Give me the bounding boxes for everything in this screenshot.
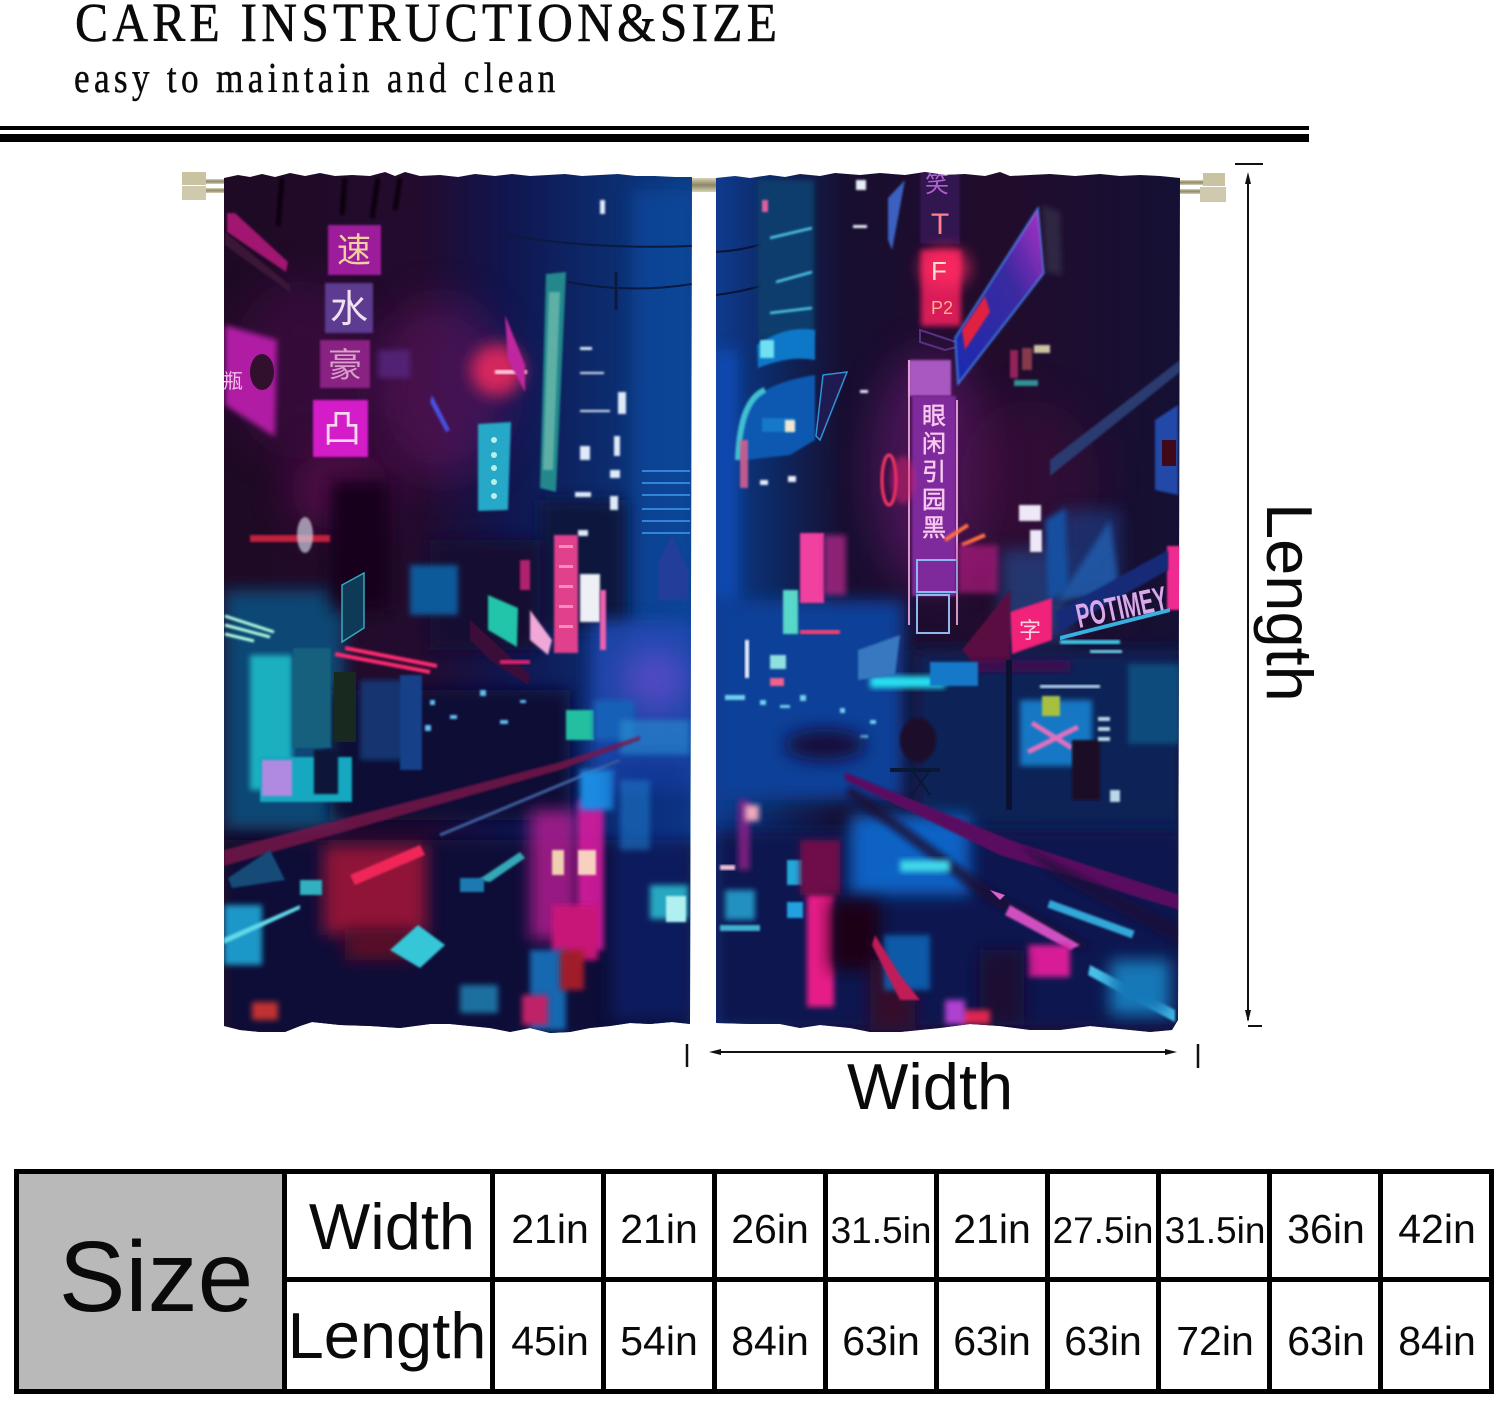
width row: 21in: [953, 1206, 1031, 1252]
length row: 54in: [620, 1318, 698, 1364]
right curtain wet street reflections: [720, 772, 1180, 1030]
width row: [309, 1190, 1476, 1263]
length row: 63in: [842, 1318, 920, 1364]
width label: Width: [847, 1050, 1013, 1123]
right curtain hanging signs: 眼: [922, 403, 946, 430]
length row: 63in: [953, 1318, 1031, 1364]
width row: 21in: [620, 1206, 698, 1252]
right curtain wires: [716, 244, 760, 296]
length row: 45in: [511, 1318, 589, 1364]
right curtain shop signage: POTIMEY: [1073, 579, 1171, 636]
right curtain panel: [712, 170, 1184, 1035]
length row: 84in: [731, 1318, 809, 1364]
right curtain blurred lighting: [714, 350, 1184, 1030]
left curtain neon signs: 瓶: [223, 370, 243, 393]
right curtain hanging signs: 笑: [925, 171, 949, 198]
length row: 72in: [1176, 1318, 1254, 1364]
size header cell: Size: [59, 1221, 253, 1333]
left curtain wet street reflections: [224, 736, 690, 1030]
width row: 26in: [731, 1206, 809, 1252]
left curtain base colour: [220, 170, 695, 1035]
width dimension arrow: [687, 1044, 1198, 1068]
table grid: [14, 1169, 1494, 1394]
width row: 27.5in: [1053, 1210, 1153, 1251]
header divider: [0, 126, 1309, 142]
length row: 84in: [1398, 1318, 1476, 1364]
right curtain shop signage: [725, 546, 1184, 810]
width row: 21in: [511, 1206, 589, 1252]
right curtain tower: [738, 180, 905, 488]
left curtain storefronts: [225, 616, 690, 802]
right curtain hanging signs: [783, 171, 1180, 634]
width row: Width: [309, 1190, 475, 1263]
left curtain blurred lighting: [224, 190, 695, 1040]
left curtain fabric folds and wires: [278, 178, 692, 310]
right curtain hanging signs: F: [931, 256, 947, 286]
left curtain neon signs: 水: [330, 289, 368, 331]
right curtain hanging signs: P2: [931, 298, 953, 318]
width row: 42in: [1398, 1206, 1476, 1252]
right curtain shop signage: 字: [1019, 618, 1041, 643]
length dimension arrow: [1235, 164, 1263, 1026]
right curtain hanging signs: 黑: [922, 515, 946, 542]
width row: 31.5in: [1165, 1210, 1265, 1251]
left curtain neon signs: 凸: [323, 409, 361, 451]
right curtain hanging signs: 闲: [922, 431, 946, 458]
left curtain panel: [220, 170, 695, 1040]
size header cell: [19, 1174, 282, 1389]
left curtain neon signs: 速: [337, 232, 371, 270]
right curtain base colour: [712, 170, 1184, 1035]
length row: 63in: [1287, 1318, 1365, 1364]
left curtain neon signs: [223, 200, 690, 655]
left curtain neon signs: 豪: [328, 347, 362, 385]
width row: 31.5in: [831, 1210, 931, 1251]
right curtain hanging signs: T: [931, 208, 949, 241]
size table: [14, 1169, 1494, 1394]
length label: Length: [1253, 503, 1326, 702]
length row: [288, 1299, 1476, 1372]
length row: Length: [288, 1299, 486, 1372]
right curtain hanging signs: 引: [922, 459, 946, 486]
length row: 63in: [1064, 1318, 1142, 1364]
curtain rod: [182, 172, 1226, 202]
right curtain hanging signs: 园: [922, 487, 946, 514]
width row: 36in: [1287, 1206, 1365, 1252]
subtitle: easy to maintain and clean: [74, 55, 555, 102]
